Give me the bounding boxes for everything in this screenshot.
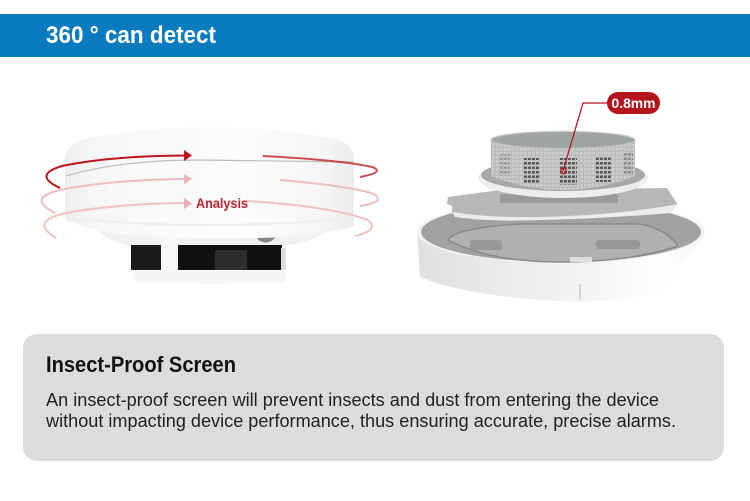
header title: 360 ° can detect [46, 22, 216, 49]
mounting plate [447, 188, 678, 221]
panel: insect-proof screen description [23, 334, 724, 461]
analysis label: Analysis [196, 195, 248, 211]
panel heading: Insect-Proof Screen [46, 352, 236, 377]
header banner [0, 14, 750, 57]
detector main body [65, 127, 354, 239]
callout: 0.8mm [561, 92, 660, 174]
panel body text [45, 389, 676, 431]
rotation arrow, strong [46, 150, 377, 188]
detector base, exploded view [417, 92, 705, 302]
smoke detector, assembled, with rotation arrows [42, 127, 378, 284]
base shell [417, 201, 705, 302]
panel body text: without impacting device performance, thus ensuring accurate, precise alarms. [45, 410, 676, 431]
rotation arrow, medium [42, 174, 378, 213]
callout: 0.8mm: 0.8mm [612, 95, 656, 111]
detector lower sensor chamber [97, 228, 325, 284]
insect-proof mesh screen [478, 132, 648, 198]
panel body text: An insect-proof screen will prevent insects and dust from entering the device [46, 389, 659, 410]
rotation arrow, light [44, 198, 372, 238]
